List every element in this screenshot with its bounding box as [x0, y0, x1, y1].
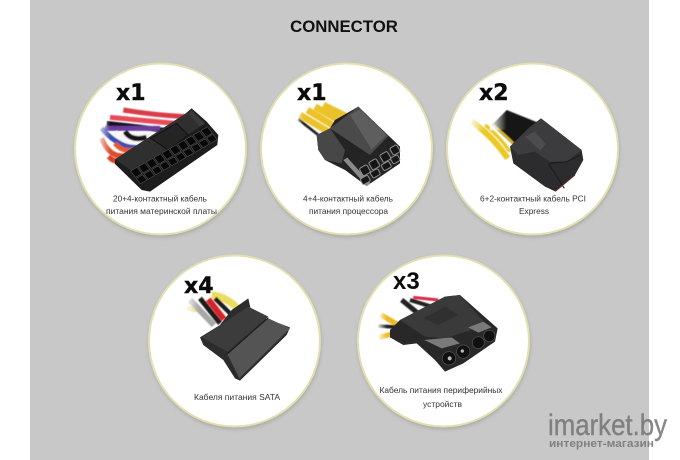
caption: питания материнской платы: [106, 206, 217, 216]
icon: 6+2 pin connector with black and yellow wires: [468, 107, 583, 192]
quantity x4: x4: [184, 274, 214, 299]
caption: [106, 194, 217, 216]
caption: [380, 385, 503, 409]
caption: Кабеля питания SATA: [194, 392, 280, 402]
caption: 6+2-контактный кабель PCI: [480, 194, 586, 204]
caption: [480, 194, 586, 216]
panel: 20+4 pin connector: [75, 64, 247, 237]
title: CONNECTOR: [290, 17, 398, 36]
caption: устройств: [423, 399, 462, 409]
caption: 4+4-контактный кабель: [303, 194, 393, 204]
icon: 4+4 pin connector with yellow wires: [293, 102, 400, 186]
panel: Molex peripheral connector: [358, 256, 530, 429]
quantity x2: x2: [479, 81, 508, 106]
panel: SATA power connector: [149, 256, 321, 429]
caption: [303, 194, 393, 216]
quantity x3: x3: [393, 268, 420, 295]
icon: 20+4 pin connector with wires: [95, 107, 218, 192]
quantity x1: x1: [297, 81, 326, 106]
icon: Molex connector with wires: [377, 295, 498, 372]
caption: Express: [519, 206, 549, 216]
caption: питания процессора: [309, 206, 388, 216]
quantity x1: x1: [116, 81, 146, 106]
caption: 20+4-контактный кабель: [113, 194, 207, 204]
watermark: imarket.by: интернет-магазин: [549, 438, 654, 450]
icon: SATA connector with wires: [185, 295, 290, 381]
caption: Кабель питания периферийных: [380, 385, 503, 395]
panel: 6+2 pin PCI Express connector: [447, 64, 619, 237]
panel: 4+4 pin CPU connector: [261, 64, 433, 237]
